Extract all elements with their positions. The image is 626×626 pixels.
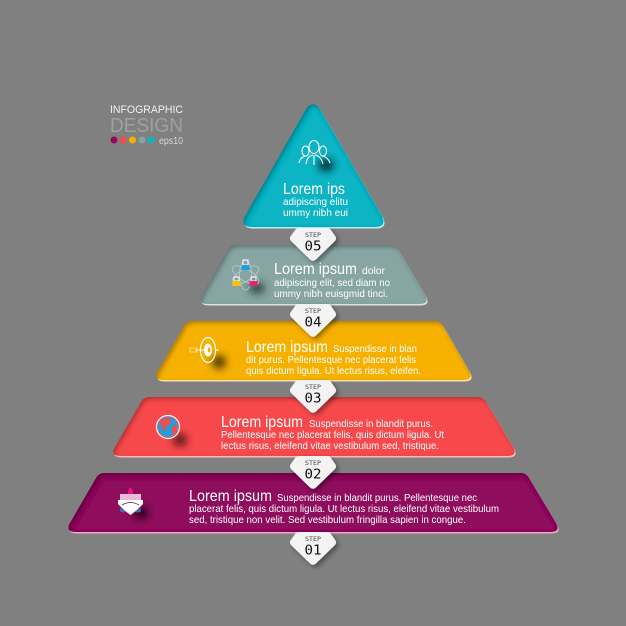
badge: step 01: STEP <box>305 536 321 543</box>
text: step 4: Lorem ipsum <box>274 261 357 278</box>
text: step 3: quis dictum ligula. Ut lectus risus, eleifen. <box>246 366 421 377</box>
icon: people <box>299 140 334 172</box>
text: step 4: ummy nibh euisgmid tinci. <box>274 289 388 300</box>
text: step 1: Lorem ipsum <box>189 488 272 505</box>
text: step 4 <box>274 261 390 300</box>
icon: globe <box>156 416 187 446</box>
logo heading: INFOGRAPHIC <box>110 104 183 116</box>
icon: ship <box>118 488 148 519</box>
badge: step 02: STEP <box>305 460 321 467</box>
badge: step 01: 01 <box>304 544 322 558</box>
badge: step 04 <box>290 304 336 337</box>
text: step 1: Suspendisse in blandit purus. Pellentesque nec <box>277 493 477 504</box>
icon: target with arrow <box>190 338 226 369</box>
badge: step 02 <box>290 456 336 489</box>
panel: step 3 trapezoid <box>156 321 472 382</box>
badge: step 03: 03 <box>304 392 322 406</box>
badge: step 05 <box>290 228 336 261</box>
text: step 5: ummy nibh eui <box>283 208 348 219</box>
text: step 4: dolor <box>362 266 386 277</box>
text: step 2: Pellentesque nec placerat felis, quis dictum ligula. Ut <box>221 430 444 441</box>
panel: step 5 triangle <box>244 104 384 228</box>
panel: step 2 trapezoid <box>113 397 516 458</box>
text: step 3: dit purus. Pellentesque nec placerat felis <box>246 355 416 366</box>
eps label: eps10 <box>159 136 183 147</box>
text: step 1: placerat felis, quis dictum ligula. Ut lectus risus, eleifend vitae vestibulum <box>189 504 499 515</box>
text: step 3: Suspendisse in blan <box>333 344 417 355</box>
colour dots <box>110 136 154 144</box>
badge: step 04: STEP <box>305 308 321 315</box>
text: step 2: lectus risus, eleifend vitae vestibulum sed, tristique. <box>221 441 439 452</box>
badge: step 04: 04 <box>304 316 322 330</box>
text: step 1: sed, tristique non velit. Sed vestibulum fringilla sapien in congue. <box>189 515 466 526</box>
badge: step 05: STEP <box>305 232 321 239</box>
text: step 3: Lorem ipsum <box>246 339 328 356</box>
text: step 4: adipiscing elit, sed diam no <box>274 278 390 289</box>
text: step 5 <box>283 181 348 219</box>
badge: step 01 <box>290 532 336 565</box>
badge: step 05: 05 <box>304 240 322 254</box>
panel: step 1 trapezoid <box>68 473 559 534</box>
text: step 2: Suspendisse in blandit purus. <box>309 419 433 430</box>
logo block: infographic design eps10 <box>110 104 183 147</box>
badge: step 03 <box>290 380 336 413</box>
text: step 3 <box>246 339 421 377</box>
text: step 2: Lorem ipsum <box>221 414 303 431</box>
text: step 5: Lorem ips <box>283 181 345 198</box>
badge: step 03: STEP <box>305 384 321 391</box>
panel: step 4 trapezoid <box>200 245 428 306</box>
badge: step 02: 02 <box>304 468 322 482</box>
icon: atom with flasks <box>230 260 265 294</box>
text: step 5: adipiscing elitu <box>283 197 348 208</box>
logo subheading: DESIGN <box>110 115 183 137</box>
text: step 2 <box>221 414 444 452</box>
text: step 1 <box>189 488 499 526</box>
